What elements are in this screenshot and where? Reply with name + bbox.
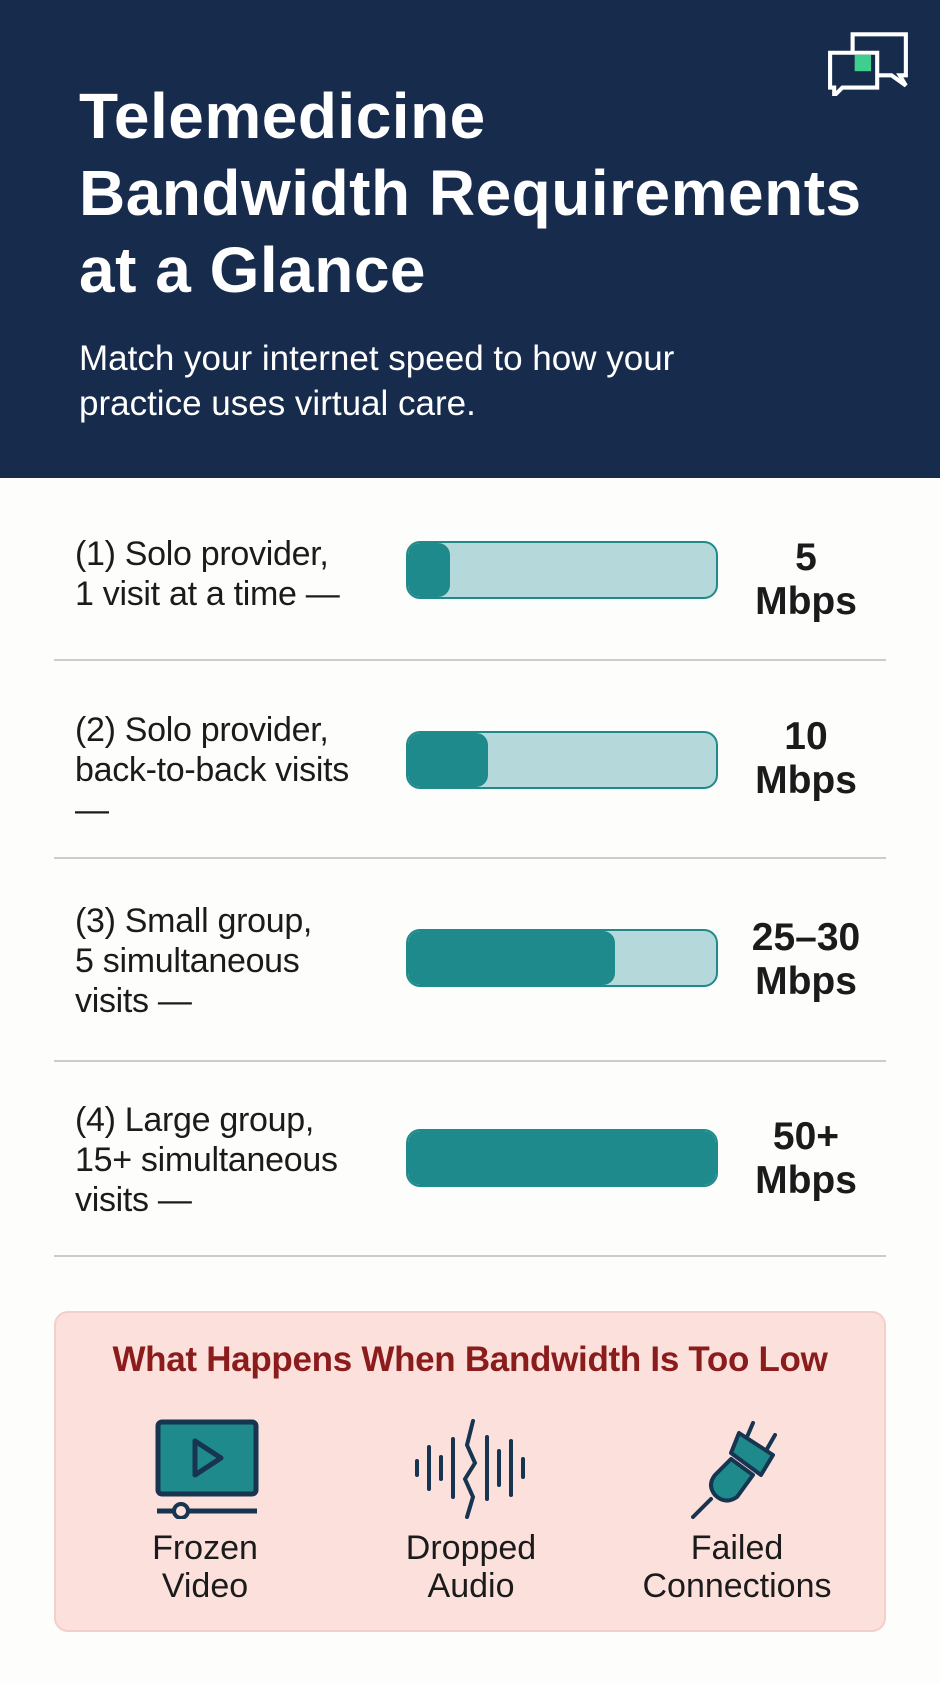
title: Telemedicine [79,80,486,152]
icon: chat bubbles [828,32,908,96]
title: at a Glance [79,234,426,306]
icon: plug [690,1420,778,1519]
value 1 [755,536,857,623]
label 1 [75,535,340,613]
label 2 [75,711,349,829]
label: failed connections [642,1529,832,1605]
label: failed connections: Failed [691,1529,783,1567]
value 1: Mbps [755,580,857,623]
value 4 [755,1115,857,1202]
item: failed connections [642,1420,832,1605]
icon: broken waveform [415,1419,525,1519]
label: frozen video: Frozen [152,1529,258,1567]
value 4: 50+ [773,1115,839,1158]
subtitle: Match your internet speed to how your [79,339,674,378]
item: frozen video [152,1420,258,1605]
label 4 [75,1101,338,1219]
value 1: 5 [795,536,817,579]
value 4: Mbps [755,1159,857,1202]
value 2: 10 [784,715,828,758]
label: frozen video [152,1529,258,1605]
label: dropped audio: Audio [428,1567,514,1605]
title [79,80,862,306]
label 1: 1 visit at a time — [75,575,340,613]
label: failed connections: Connections [642,1567,832,1605]
label 2: — [75,791,109,829]
panel: bandwidth too low [54,1311,886,1632]
subtitle [79,339,674,423]
label 3: visits — [75,982,192,1020]
subtitle: practice uses virtual care. [79,384,476,423]
label 4: visits — [75,1181,192,1219]
icon: video player [156,1420,258,1519]
title: Bandwidth Requirements [79,157,862,229]
row 3 [75,902,860,1020]
value 2 [755,715,857,802]
bar 1 [406,541,718,599]
label 4: (4) Large group, [75,1101,314,1139]
header panel [0,0,940,478]
value 3: 25–30 [752,916,860,959]
label 3: 5 simultaneous [75,942,300,980]
label: frozen video: Video [162,1567,248,1605]
value 2: Mbps [755,759,857,802]
label 1: (1) Solo provider, [75,535,329,573]
label 3: (3) Small group, [75,902,312,940]
item: dropped audio [406,1419,536,1605]
label: dropped audio: Dropped [406,1529,536,1567]
bar 3 [406,929,718,987]
label 2: back-to-back visits [75,751,349,789]
label 4: 15+ simultaneous [75,1141,338,1179]
label: dropped audio [406,1529,536,1605]
row 2 [75,711,857,829]
bar 2 [406,731,718,789]
value 3: Mbps [755,960,857,1003]
label 3 [75,902,312,1020]
bar 4 [406,1129,718,1187]
value 3 [752,916,860,1003]
row 1 [75,535,857,623]
label 2: (2) Solo provider, [75,711,329,749]
panel heading: What Happens When Bandwidth Is Too Low [112,1340,828,1379]
row 4 [75,1101,857,1219]
